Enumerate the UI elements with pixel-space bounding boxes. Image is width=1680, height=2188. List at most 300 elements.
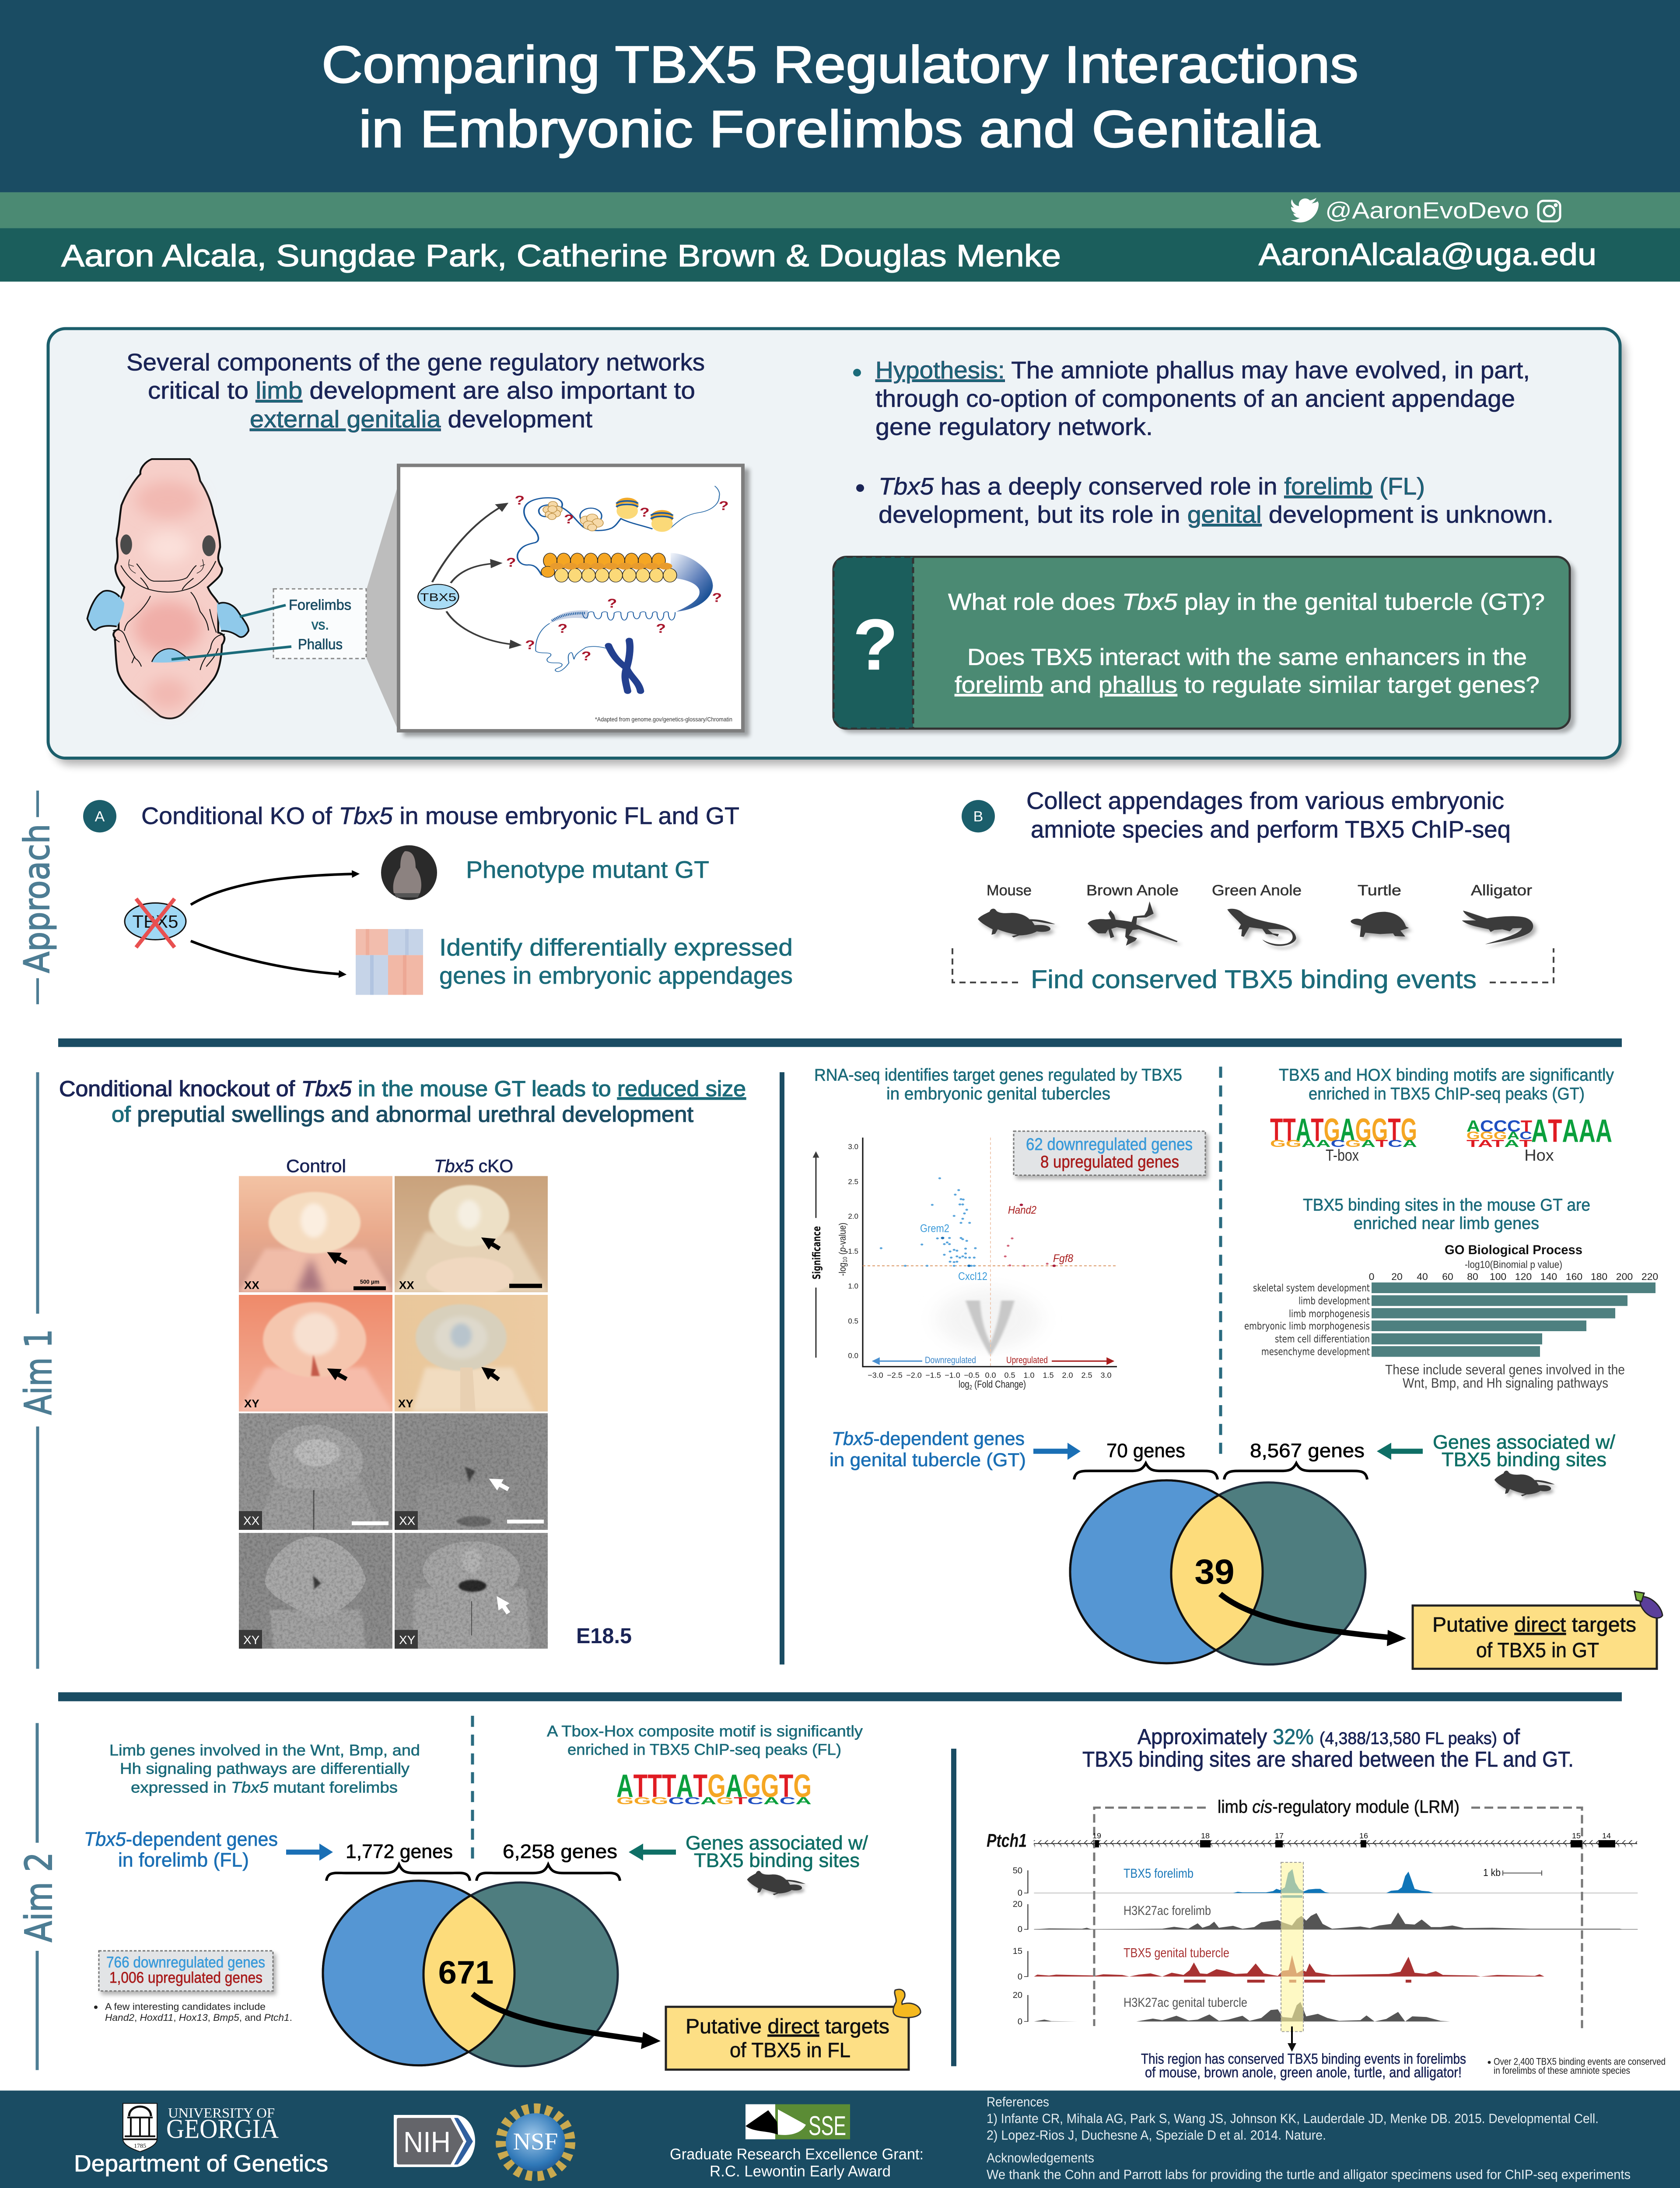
species labels: Green Anole: [1212, 882, 1302, 899]
y axis title: p-value): [837, 1219, 848, 1252]
binding sites heading: enriched near limb genes: [1354, 1214, 1539, 1233]
motif logo: composite: GGG CC A G T C A C A: [616, 1795, 812, 1807]
callout: FL targets: of TBX5 in FL: [730, 2039, 850, 2062]
count: 6,258 genes: 6,258 genes: [503, 1841, 617, 1862]
authors: Aaron Alcala, Sungdae Park, Catherine Brown & Douglas Menke: [61, 239, 1061, 273]
track names: H3K27ac genital tubercle: [1124, 1995, 1247, 2010]
photo: SEM cKO XX: [395, 1413, 548, 1530]
conservation note: [1141, 2051, 1466, 2081]
logo: University of Georgia: [123, 2104, 279, 2152]
callout: GT targets: [1413, 1606, 1657, 1669]
hypothesis bullet: [853, 357, 1530, 440]
right set label: [686, 1832, 868, 1871]
y tick labels: [848, 1143, 858, 1360]
references: 2) Lopez-Rios J, Duchesne A, Speziale D et al. 2014. Nature.: [987, 2128, 1326, 2143]
gene model: 15: [1572, 1831, 1581, 1840]
track y labels: 15: [1013, 1946, 1022, 1956]
conserved binding label: Find conserved TBX5 binding events: [1031, 964, 1477, 994]
chart note: Wnt, Bmp, and Hh signaling pathways: [1403, 1375, 1608, 1391]
arrow: green: [629, 1844, 676, 1861]
nucleosomes: [543, 498, 673, 532]
photo: SEM control XY: XY: [243, 1633, 259, 1647]
track y labels: [1013, 1866, 1022, 2027]
left set label: Tbx5-dependent genes: [832, 1428, 1025, 1449]
x tick labels: 3.0: [1100, 1371, 1112, 1379]
photo: cKO XY: XY: [398, 1398, 413, 1410]
limb genes text: Hh signaling pathways are differentially: [120, 1760, 410, 1778]
embryo illustration: [88, 459, 248, 719]
motif logo: T-box: [1270, 1112, 1417, 1164]
panel: approach B: [952, 787, 1554, 994]
expression label: [439, 934, 793, 989]
hypothesis bullet: Hypothesis: The amniote phallus may have evolved, in part,: [875, 357, 1530, 383]
gene labels: Hand2: [1008, 1204, 1036, 1216]
bar chart: GO biological process: 180: [1591, 1271, 1607, 1282]
heading: TBX5 and HOX binding motifs are significantly: [1279, 1066, 1614, 1085]
bar chart: GO biological process: mesenchyme development: [1261, 1346, 1370, 1358]
x tick labels: −2.5: [887, 1371, 903, 1379]
acknowledgements: Acknowledgements: [987, 2151, 1094, 2165]
right forelimb: [217, 602, 248, 637]
heading B: amniote species and perform TBX5 ChIP-seq: [1031, 816, 1511, 843]
intro text: Several components of the gene regulatory networks: [126, 349, 705, 376]
arrow: down to note: [1291, 2027, 1293, 2048]
arrow: to expression: [191, 941, 343, 975]
left set label: [830, 1428, 1026, 1470]
intro text: [126, 349, 705, 432]
x tick labels: 0.0: [985, 1371, 996, 1379]
chart note: [1385, 1362, 1625, 1391]
species labels: Turtle: [1358, 882, 1401, 899]
references: [987, 2095, 1599, 2143]
track names: [1124, 1866, 1247, 2010]
forelimbs vs phallus label: [172, 589, 366, 659]
badge B: [962, 800, 995, 832]
x tick labels: 2.0: [1062, 1371, 1073, 1379]
conservation note: This region has conserved TBX5 binding events in forelimbs: [1141, 2051, 1466, 2067]
panel: background and hypothesis: [48, 329, 1625, 765]
left forelimb: [88, 591, 124, 630]
right set label: TBX5 binding sites: [694, 1849, 860, 1871]
bar chart: GO biological process: [1244, 1243, 1658, 1358]
direction arrows: [875, 1354, 1111, 1365]
phenotype label: Phenotype mutant GT: [466, 856, 709, 883]
species labels: Mouse: [987, 882, 1032, 899]
panel: motifs: [1244, 1066, 1658, 1391]
grant text: Graduate Research Excellence Grant:: [670, 2146, 924, 2163]
x tick labels: 1.5: [1043, 1371, 1054, 1379]
photo: cKO XY: [395, 1295, 548, 1412]
y tick labels: 3.0: [848, 1143, 858, 1151]
icon: instagram: [1538, 201, 1560, 221]
icon: turtle: [1351, 912, 1409, 937]
forelimbs vs phallus label: Phallus: [298, 637, 343, 652]
composite motif text: A Tbox-Hox composite motif is significantly: [547, 1722, 863, 1740]
question marks: ?: [719, 499, 729, 513]
callout: FL targets: Putative direct targets: [686, 2015, 889, 2038]
bar chart: GO biological process: 200: [1616, 1271, 1633, 1282]
gene model: 18: [1201, 1831, 1210, 1840]
x tick labels: 0.5: [1004, 1371, 1015, 1379]
motif logo: Hox: ATAAA: [1531, 1112, 1612, 1149]
photo: SEM control XX: XX: [243, 1514, 259, 1527]
motif logo: Hox: ACCC T: [1466, 1117, 1532, 1135]
dashed divider: [471, 1716, 474, 1858]
tbx5 node: [418, 584, 458, 609]
photo: SEM control XY: [239, 1533, 392, 1649]
callout: FL targets: [666, 2007, 909, 2069]
heading: of preputial swellings and abnormal urethral development: [112, 1102, 693, 1126]
gene labels: Fgf8: [1053, 1252, 1074, 1265]
y tick labels: 2.0: [848, 1212, 858, 1220]
gene labels: [920, 1204, 1074, 1283]
track names: TBX5 forelimb: [1124, 1866, 1194, 1881]
heading: [1279, 1066, 1614, 1104]
bar chart: GO biological process: skeletal system development: [1253, 1282, 1370, 1294]
callout: GT targets: Putative direct targets: [1432, 1613, 1636, 1636]
chromatin figure: TBX5: [420, 591, 456, 603]
title: [322, 35, 1358, 158]
arrow: to targets: [472, 1994, 661, 2049]
bar chart: GO biological process: 220: [1642, 1271, 1658, 1282]
direction arrows: Downregulated: [925, 1354, 976, 1365]
motif logo: T-box: TTATGAGGTG: [1270, 1112, 1417, 1148]
DE gene count box: [1014, 1131, 1205, 1175]
icon: zoom wedge: [367, 483, 399, 731]
intro text: external genitalia development: [250, 406, 592, 432]
right set label: TBX5 binding sites: [1442, 1448, 1606, 1470]
left set label: [84, 1828, 278, 1871]
scale bar: [1483, 1867, 1542, 1879]
bar chart: GO biological process: 120: [1515, 1271, 1532, 1282]
right set label: Genes associated w/: [686, 1832, 868, 1854]
heading B: [1026, 787, 1511, 843]
direction arrows: Upregulated: [1006, 1354, 1048, 1365]
title: Comparing TBX5 Regulatory Interactions: [322, 35, 1358, 94]
heading: Conditional knockout of Tbx5 in the mouse GT leads to reduced size: [59, 1076, 746, 1101]
x tick labels: −1.0: [945, 1371, 960, 1379]
heading: enriched in TBX5 ChIP-seq peaks (GT): [1309, 1084, 1585, 1104]
logo: SSE: SSE: [808, 2111, 846, 2141]
logo: SSE: [746, 2104, 850, 2141]
question callout: Does TBX5 interact with the same enhancers in the: [967, 645, 1527, 670]
track y labels: 0: [1018, 2017, 1022, 2027]
heading: in embryonic genital tubercles: [886, 1084, 1110, 1104]
bar chart: GO biological process: 100: [1490, 1271, 1506, 1282]
expression label: genes in embryonic appendages: [439, 962, 793, 989]
question marks: ?: [656, 621, 666, 635]
badge B: B: [973, 809, 983, 825]
left set label: in genital tubercle (GT): [830, 1450, 1026, 1470]
bar chart: GO biological process: -log10(Binomial p value): [1465, 1259, 1562, 1270]
volcano cloud: [937, 1288, 1040, 1356]
twitter handle: @AaronEvoDevo: [1325, 198, 1529, 224]
motif logo: T-box: GG AA C G A T C A: [1270, 1138, 1417, 1150]
venn diagram: 39: [1194, 1553, 1235, 1592]
footer: [0, 2090, 1680, 2188]
logo: NIH: NIH: [403, 2126, 451, 2159]
x axis title: (Fold Change): [972, 1379, 1026, 1390]
column divider: [951, 1749, 956, 2066]
question marks: ?: [514, 493, 525, 507]
question callout: What role does Tbx5 play in the genital tubercle (GT)?: [948, 589, 1545, 615]
motif logo: Hox: Hox: [1524, 1146, 1554, 1164]
count: 70 genes: 70 genes: [1106, 1440, 1185, 1462]
question marks: ?: [607, 596, 617, 610]
icon: mutant GT photo: [381, 845, 437, 900]
species labels: Brown Anole: [1086, 882, 1179, 899]
left set label: in forelimb (FL): [118, 1849, 249, 1871]
photo: SEM cKO XX: XX: [399, 1514, 415, 1527]
composite motif text: enriched in TBX5 ChIP-seq peaks (FL): [567, 1741, 841, 1758]
divider: [58, 1692, 1622, 1701]
chromatin fibre: [541, 553, 677, 582]
bar chart: GO biological process: embryonic limb morphogenesis: [1244, 1320, 1370, 1332]
open chromatin loop: [550, 610, 588, 623]
tbx5 role bullet: Tbx5 has a deeply conserved role in forelimb (FL): [878, 473, 1425, 500]
x tick labels: −2.0: [906, 1371, 922, 1379]
photo: control XX: 500 µm: [360, 1279, 379, 1285]
bar chart: GO biological process: limb development: [1298, 1295, 1370, 1307]
icon: twitter bird: [1291, 198, 1319, 222]
gene model: 17: [1275, 1831, 1284, 1840]
venn diagram: [323, 1881, 618, 2066]
y tick labels: 2.5: [848, 1178, 858, 1186]
y axis title: (: [837, 1252, 848, 1257]
icon: brown anole: [1088, 901, 1178, 946]
icon: mouse: [747, 1871, 805, 1895]
arrow: blue: [286, 1844, 333, 1861]
arrow: to targets: [1220, 1594, 1406, 1646]
x tick labels: −0.5: [964, 1371, 980, 1379]
gene model: 19: [1092, 1831, 1101, 1840]
points: [880, 1177, 1056, 1267]
logo: NIH: [394, 2115, 475, 2167]
bar chart: GO biological process: 20: [1391, 1271, 1403, 1282]
heading: TBX5 binding sites are shared between the FL and GT.: [1082, 1748, 1574, 1771]
photo: SEM control XX: [239, 1413, 392, 1530]
x tick labels: [868, 1371, 1112, 1379]
body: [113, 459, 224, 719]
tbx5 knockout node: [125, 899, 186, 947]
species labels: Alligator: [1471, 882, 1532, 899]
hypothesis bullet: through co-option of components of an ancient appendage: [875, 385, 1515, 412]
section label: aim 2: Aim 2: [17, 1852, 60, 1942]
arrow: blue: [1033, 1443, 1081, 1460]
dashed bracket: [952, 948, 1554, 982]
bar chart: GO biological process: GO Biological Process: [1445, 1243, 1582, 1257]
gene labels: Cxcl12: [958, 1270, 987, 1283]
LRM bracket: limb cis-regulatory module (LRM): [1218, 1796, 1460, 1816]
DE gene count box: 62 downregulated genes: [1026, 1135, 1193, 1154]
heading: [59, 1076, 746, 1126]
conservation note: of mouse, brown anole, green anole, turtle, and alligator!: [1145, 2065, 1462, 2081]
candidates note: [94, 2001, 292, 2023]
arrow: green: [1377, 1443, 1423, 1460]
photo: cKO XX: XX: [399, 1280, 414, 1291]
question marks: ?: [558, 621, 567, 635]
expression label: Identify differentially expressed: [439, 934, 793, 961]
track names: TBX5 genital tubercle: [1124, 1946, 1229, 1960]
LRM bracket: [1094, 1796, 1582, 2028]
references: References: [987, 2095, 1049, 2109]
column label: cKO: Tbx5 cKO: [434, 1156, 513, 1176]
bar chart: GO biological process: limb morphogenesis: [1289, 1308, 1370, 1320]
forelimbs vs phallus label: Forelimbs: [289, 597, 351, 613]
track names: H3K27ac forelimb: [1124, 1904, 1211, 1918]
panel: RNA-seq: [810, 1066, 1205, 1391]
dashed divider aim 1: [1219, 1067, 1222, 1457]
badge A: A: [95, 809, 105, 825]
section label: aim 1: Aim 1: [17, 1329, 60, 1415]
x tick labels: −1.5: [925, 1371, 941, 1379]
phallus: [152, 649, 189, 663]
limb genes text: [109, 1742, 420, 1796]
y axis title: 10: [841, 1257, 848, 1262]
bar chart: GO biological process: 80: [1467, 1271, 1478, 1282]
track y labels: 0: [1018, 1888, 1022, 1898]
tbx5 role bullet: [856, 473, 1554, 528]
braces: [1074, 1463, 1367, 1480]
intro text: critical to limb development are also important to: [148, 377, 695, 404]
gene model: 14: [1602, 1831, 1611, 1840]
logo: University of Georgia: UNIVERSITY OF: [168, 2105, 275, 2121]
y tick labels: 0.0: [848, 1352, 858, 1360]
bar chart: GO biological process: 160: [1566, 1271, 1582, 1282]
title: in Embryonic Forelimbs and Genitalia: [359, 100, 1320, 158]
signal tracks: [1024, 1869, 1638, 2021]
side note: [1488, 2056, 1666, 2076]
grant text: [670, 2146, 924, 2180]
question marks: ?: [525, 638, 535, 652]
panel: aim 2 forelimb: [84, 1716, 920, 2069]
motif logo: Hox: GGG A C: [1466, 1130, 1532, 1142]
photo: control XX: [239, 1176, 392, 1292]
motif logo: T-box: T-box: [1326, 1146, 1359, 1164]
chromosome: [609, 641, 640, 691]
heatmap: [356, 929, 423, 995]
track y labels: 50: [1013, 1866, 1022, 1876]
panel: aim 1 phenotype: [59, 1076, 746, 1649]
side note: in forelimbs of these amniote species: [1494, 2065, 1630, 2076]
bar chart: GO biological process: 60: [1442, 1271, 1453, 1282]
column divider: [780, 1072, 784, 1665]
icon: mouse: [978, 909, 1055, 937]
logo: NSF: NSF: [513, 2128, 558, 2155]
logo: NSF: [501, 2109, 570, 2176]
y tick labels: 0.5: [848, 1317, 858, 1325]
dna strand: [518, 498, 653, 575]
gene model: 16: [1359, 1831, 1368, 1840]
question marks: ?: [506, 555, 516, 569]
stage label: E18.5: [576, 1624, 632, 1648]
acknowledgements: [987, 2151, 1631, 2182]
question marks: [506, 493, 729, 663]
gene model: [1034, 1831, 1637, 1848]
limb genes text: expressed in Tbx5 mutant forelimbs: [131, 1779, 398, 1796]
divider: [58, 1038, 1622, 1047]
DE gene count box: [99, 1951, 273, 1991]
email: AaronAlcala@uga.edu: [1259, 238, 1596, 272]
count: 1,772 genes: 1,772 genes: [346, 1841, 453, 1862]
photo: SEM cKO XY: [395, 1533, 548, 1649]
limb genes text: Limb genes involved in the Wnt, Bmp, and: [109, 1742, 420, 1759]
right set label: Genes associated w/: [1433, 1431, 1615, 1453]
x axis title: log: [959, 1379, 973, 1390]
question marks: ?: [581, 649, 592, 663]
bar chart: GO biological process: 40: [1417, 1271, 1428, 1282]
column label: control: Control: [286, 1156, 346, 1176]
chart note: These include several genes involved in the: [1385, 1362, 1625, 1378]
grant text: R.C. Lewontin Early Award: [710, 2163, 891, 2180]
DE gene count box: 8 upregulated genes: [1040, 1152, 1179, 1171]
icon: flexed arm: [893, 1989, 920, 2018]
arrow: to phenotype: [191, 874, 357, 905]
icon: green anole: [1227, 909, 1296, 946]
panel: approach A: [83, 800, 793, 995]
panel: aim 2 genome browser: [987, 1725, 1666, 2081]
track y labels: 20: [1013, 1900, 1022, 1909]
track y labels: 20: [1013, 1991, 1022, 2000]
question marks: ?: [564, 512, 574, 526]
panel: aim 1 venn: [830, 1428, 1662, 1669]
figure credit: *Adapted from genome.gov/genetics-glossary/Chromatin: [595, 716, 732, 722]
x tick labels: 2.5: [1081, 1371, 1092, 1379]
venn diagram: [1070, 1480, 1365, 1665]
forelimbs vs phallus label: vs.: [312, 617, 329, 633]
braces: [326, 1865, 620, 1881]
significance axis: Significance: [810, 1226, 823, 1280]
volcano plot: [810, 1138, 1117, 1391]
candidates note: Hand2, Hoxd11, Hox13, Bmp5, and Ptch1.: [105, 2012, 292, 2023]
icon: mouse: [1494, 1471, 1555, 1496]
header banner: [0, 0, 1680, 282]
icon: alligator: [1462, 911, 1533, 944]
binding sites heading: [1303, 1196, 1590, 1233]
bar chart: GO biological process: stem cell differentiation: [1275, 1333, 1370, 1345]
axes: [863, 1138, 1117, 1367]
y tick labels: 1.0: [848, 1282, 858, 1290]
x tick labels: −3.0: [868, 1371, 883, 1379]
chromatin figure: [399, 465, 749, 736]
arrows: [432, 505, 517, 645]
question callout: ?: [853, 604, 898, 685]
logo: University of Georgia: 1785: [134, 2142, 146, 2149]
motif logo: Hox: TAT A T: [1466, 1138, 1533, 1150]
gene label: Ptch1: Ptch1: [987, 1830, 1027, 1851]
x axis title: 2: [970, 1384, 972, 1391]
photo: SEM cKO XY: XY: [399, 1633, 415, 1647]
count: 8,567 genes: 8,567 genes: [1250, 1440, 1365, 1462]
hypothesis bullet: gene regulatory network.: [875, 414, 1153, 440]
logo: University of Georgia: GEORGIA: [166, 2114, 279, 2144]
icon: eggplant: [1634, 1592, 1662, 1618]
acknowledgements: We thank the Cohn and Parrott labs for providing the turtle and alligator specimens used for ChIP-seq experiments: [987, 2167, 1631, 2182]
question marks: ?: [712, 591, 722, 604]
y tick labels: 1.5: [848, 1247, 858, 1255]
references: 1) Infante CR, Mihala AG, Park S, Wang JS, Johnson KK, Lauderdale JD, Menke DB. 2015. Developmental Cell.: [987, 2111, 1599, 2126]
question callout: [833, 557, 1575, 733]
photo: control XX: XX: [244, 1280, 259, 1291]
heading: RNA-seq identifies target genes regulated by TBX5: [814, 1066, 1182, 1085]
heading: Approximately 32% (4,388/13,580 FL peaks) of: [1138, 1725, 1520, 1749]
DE gene count box: 1,006 upregulated genes: [109, 1969, 262, 1986]
heading B: Collect appendages from various embryonic: [1026, 787, 1504, 814]
section label: approach: Approach: [17, 824, 57, 973]
question marks: ?: [640, 505, 650, 519]
bar chart: GO biological process: 0: [1369, 1271, 1374, 1282]
heading A: Conditional KO of Tbx5 in mouse embryonic FL and GT: [141, 802, 739, 829]
